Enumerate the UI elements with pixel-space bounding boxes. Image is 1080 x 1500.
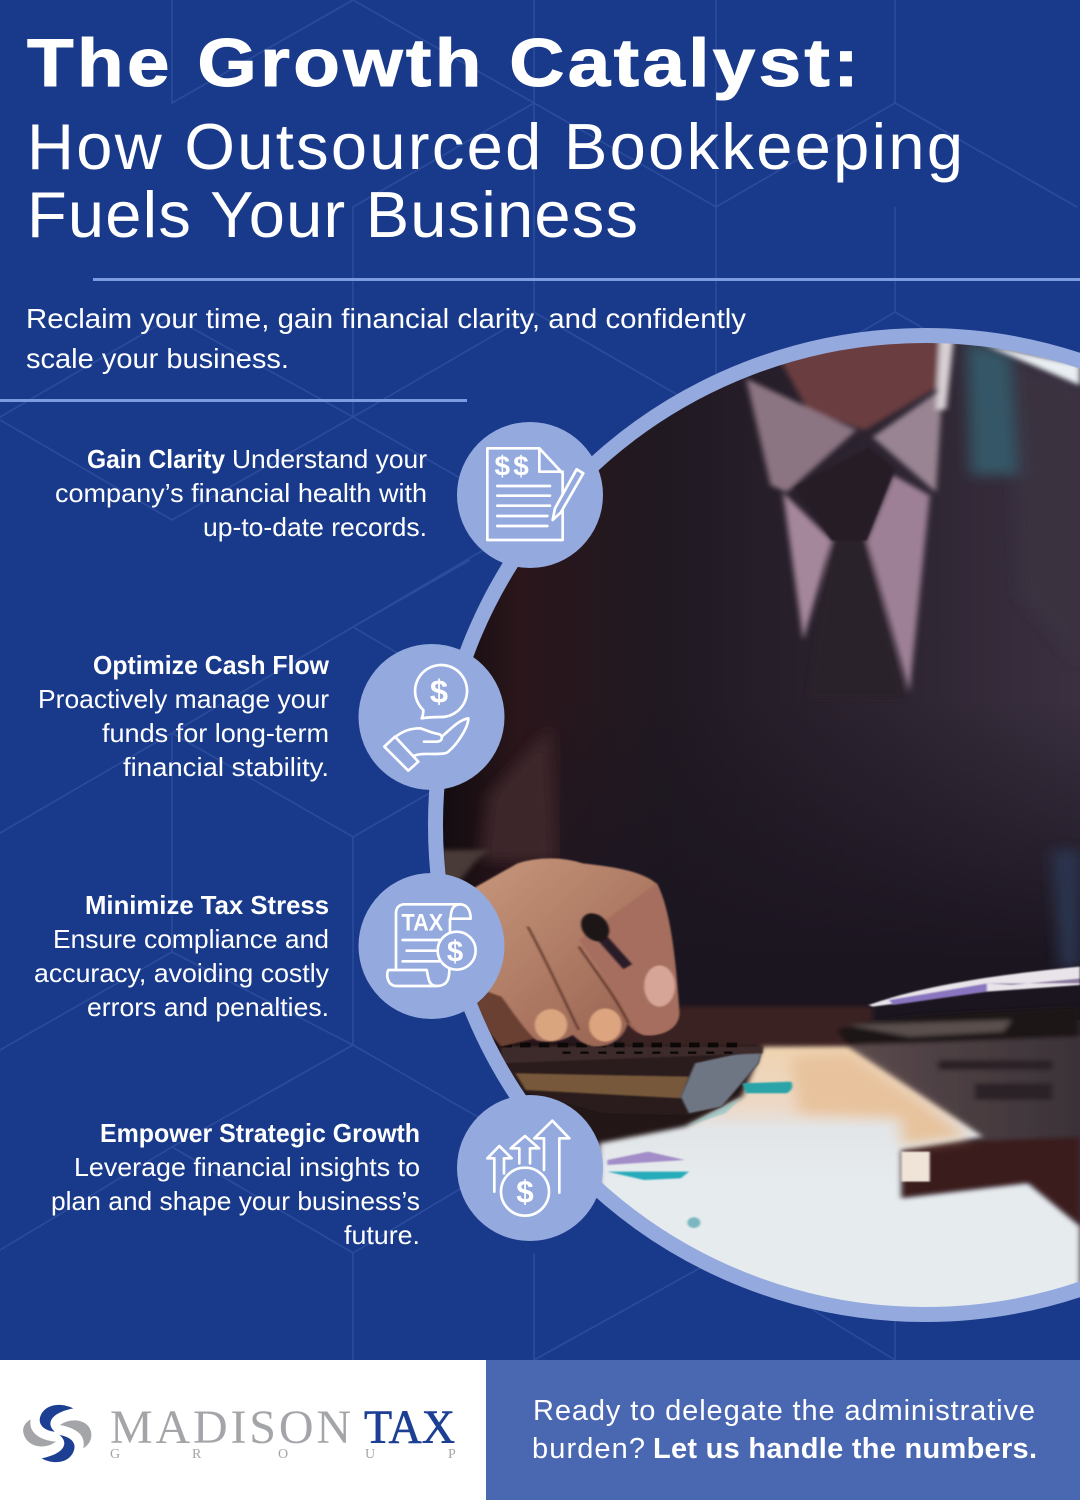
ring around photo (436, 336, 1080, 1314)
text: empower strategic growth: future. (344, 1220, 420, 1250)
text: optimize cash flow: Optimize Cash Flow (93, 650, 330, 680)
text: minimize tax stress: Ensure compliance and (53, 924, 329, 954)
item: minimize tax stress (34, 873, 504, 1022)
item: gain clarity (55, 422, 603, 568)
item: optimize cash flow (38, 644, 504, 790)
text: minimize tax stress (34, 890, 329, 1022)
logo: wordmark: R (192, 1447, 202, 1462)
icon: growth arrows with coin (457, 1095, 603, 1241)
subtitle (26, 303, 746, 374)
text: optimize cash flow: financial stability. (123, 752, 329, 782)
icon: hand with dollar bubble (358, 644, 504, 790)
text: gain clarity: up-to-date records. (203, 512, 427, 542)
title: Fuels Your Business (27, 178, 638, 251)
text: optimize cash flow: funds for long-term (102, 718, 329, 748)
item: empower strategic growth (51, 1095, 603, 1250)
subtitle: Reclaim your time, gain financial clarity, and confidently (26, 303, 746, 334)
photo: businessman using calculator (430, 320, 1080, 1330)
text: minimize tax stress: accuracy, avoiding costly (34, 958, 329, 988)
text: empower strategic growth (51, 1118, 420, 1250)
footer: call to action (486, 1360, 1080, 1500)
logo: wordmark: TAX (364, 1401, 455, 1454)
text: optimize cash flow (38, 650, 330, 782)
text: minimize tax stress: Minimize Tax Stress (85, 890, 329, 920)
text: gain clarity (55, 444, 427, 542)
text: empower strategic growth: Empower Strategic Growth (100, 1118, 420, 1148)
text: gain clarity: company’s financial health with (55, 478, 427, 508)
icon: document with pencil: $ (513, 451, 529, 482)
logo: wordmark: U (365, 1447, 375, 1462)
title (27, 25, 963, 251)
icon: growth arrows with coin: $ (516, 1175, 534, 1210)
text: optimize cash flow: Proactively manage your (38, 684, 329, 714)
text: empower strategic growth: plan and shape your business’s (51, 1186, 420, 1216)
icon: document with pencil: $ (495, 451, 511, 482)
logo: wordmark: O (278, 1447, 288, 1462)
logo: wordmark (110, 1401, 456, 1462)
logo: wordmark: MADISON (110, 1401, 353, 1454)
title: How Outsourced Bookkeeping (27, 110, 963, 183)
logo: swirl mark (23, 1405, 91, 1462)
footer: logo panel (0, 1360, 486, 1500)
text: empower strategic growth: Leverage financial insights to (74, 1152, 420, 1182)
icon: tax scroll: $ (447, 935, 463, 968)
logo: wordmark: P (448, 1447, 456, 1462)
text: gain clarity: Gain Clarity (87, 444, 226, 474)
subtitle: scale your business. (26, 343, 289, 374)
icon: tax scroll (358, 873, 504, 1019)
title: The Growth Catalyst: (27, 25, 862, 101)
logo: wordmark: G (110, 1447, 120, 1462)
footer: call to action: Let us handle the numbers. (653, 1433, 1037, 1465)
icon: tax scroll: TAX (401, 910, 443, 937)
text: gain clarity: Understand your (232, 444, 427, 474)
icon: document with pencil (457, 422, 603, 568)
icon: hand with dollar bubble: $ (430, 673, 448, 710)
text: minimize tax stress: errors and penalties. (87, 992, 329, 1022)
footer: call to action: burden? (532, 1433, 645, 1465)
footer: call to action: Ready to delegate the administrative (533, 1395, 1035, 1427)
